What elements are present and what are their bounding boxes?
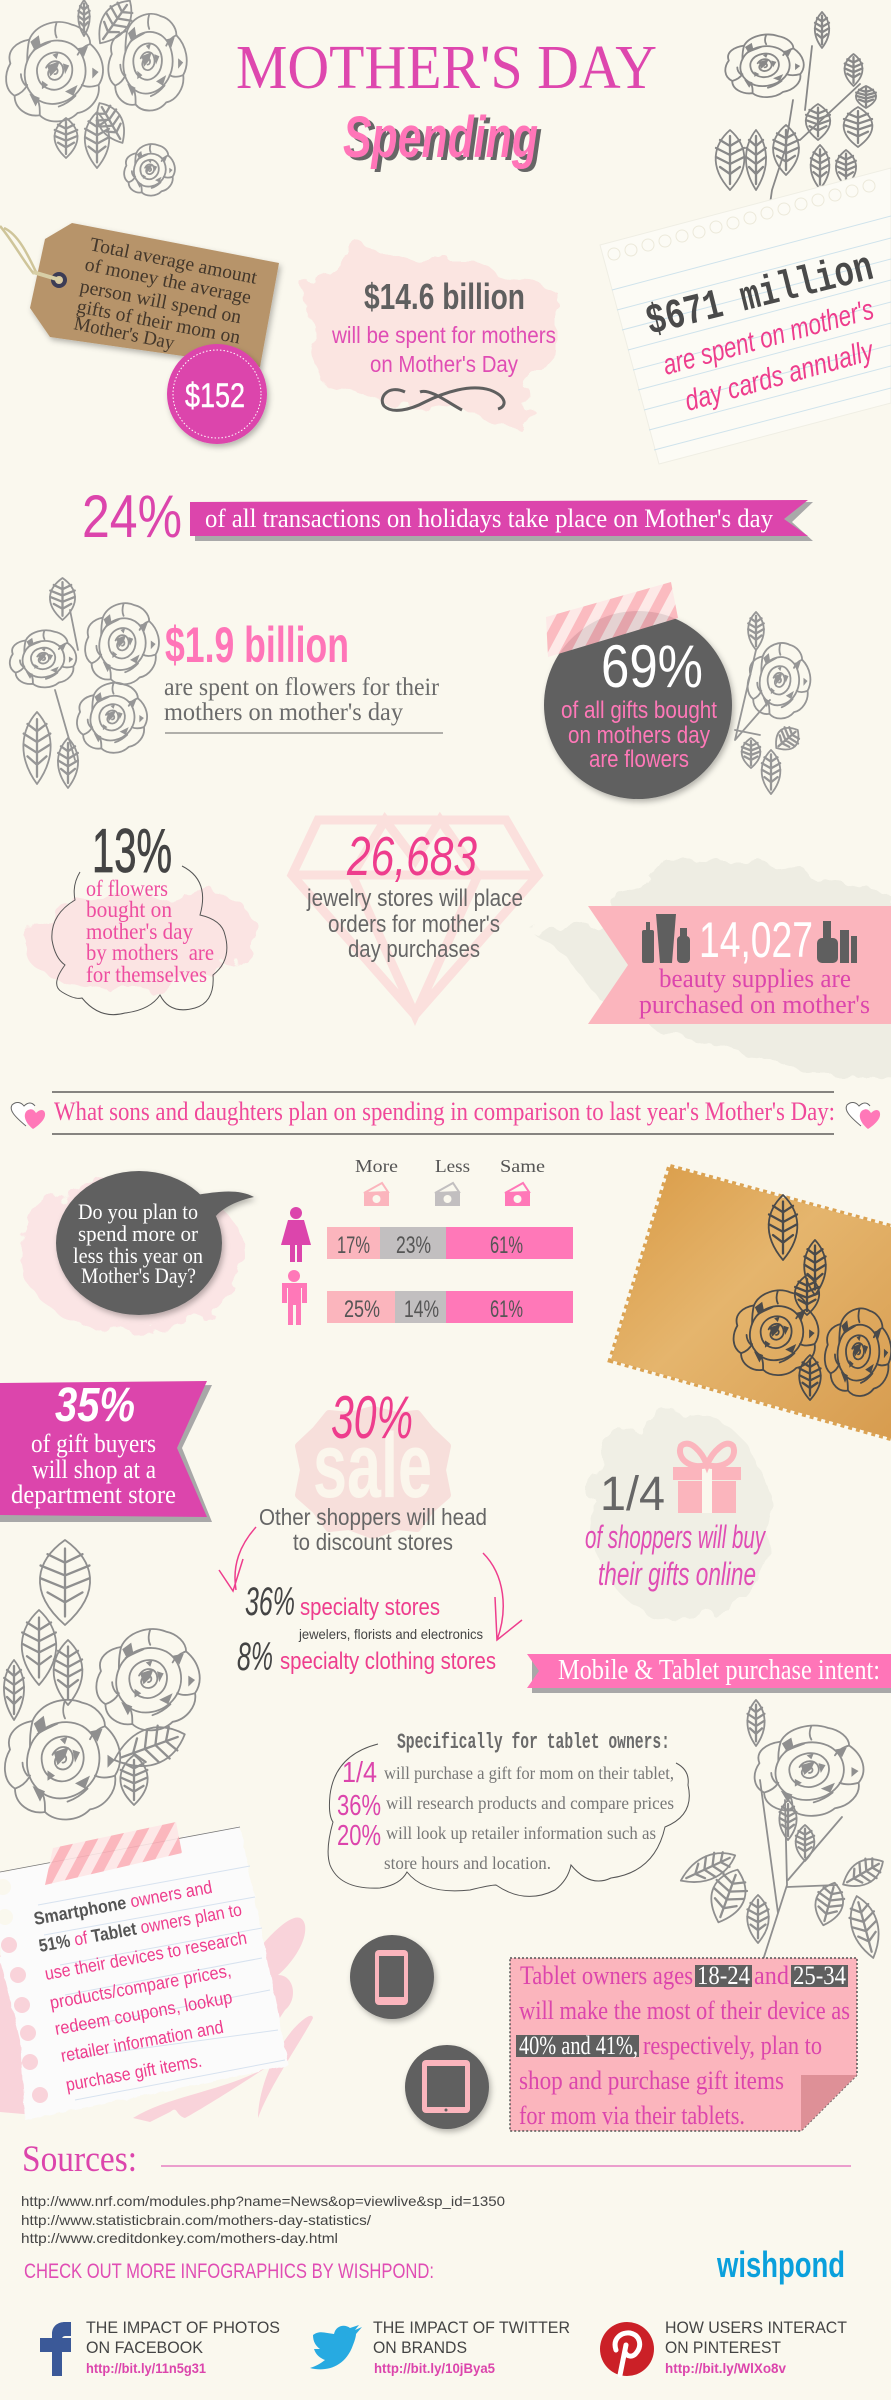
footer: pinterest: ON PINTEREST — [665, 2338, 781, 2357]
torn note: smartphone: use their devices to research — [43, 1928, 248, 1984]
legend labels: Less — [435, 1156, 470, 1176]
diamond: 26,683: jewelry stores will place — [306, 885, 523, 912]
footer: twitter: ON BRANDS — [373, 2338, 467, 2357]
cloud: tablet owners: 20% — [337, 1820, 381, 1852]
sources — [21, 2139, 851, 2246]
sale badge: 30%: 30% — [331, 1384, 413, 1451]
diamond: 26,683: day purchases — [348, 936, 480, 963]
stamp: kraft paper with rose — [611, 1167, 891, 1438]
legend labels — [355, 1156, 545, 1176]
lined note paper — [600, 168, 891, 464]
sale badge: 30%: Other shoppers will head — [259, 1504, 487, 1530]
bar: female: 23% — [396, 1232, 431, 1259]
bar: female: 17% — [337, 1232, 370, 1259]
kraft tag: gifts of their mom on — [75, 296, 242, 349]
icon: tablet — [405, 2045, 489, 2129]
stat: 1/4 online: 1/4 — [600, 1468, 665, 1521]
stat: 1/4 online: of shoppers will buy — [585, 1519, 766, 1555]
note: tablet owners ages: 18-24 — [697, 1961, 750, 1990]
cloud: tablet owners — [328, 1730, 689, 1896]
icon: money less — [435, 1183, 460, 1206]
stat: $1.9 billion — [164, 617, 443, 733]
rose left — [4, 1540, 200, 1820]
rose right of 69% — [735, 612, 810, 794]
circle: 69%: 69% — [601, 633, 703, 700]
banner: 35% — [0, 1379, 212, 1522]
diamond: 26,683: orders for mother's — [328, 911, 500, 938]
icon: phone — [350, 1935, 434, 2019]
torn note: smartphone: redeem coupons, lookup — [53, 1987, 234, 2039]
cloud: 13%: mother's day — [86, 919, 193, 944]
banner: 35%: of gift buyers — [31, 1429, 156, 1458]
legend labels: More — [355, 1156, 398, 1176]
cloud: tablet owners: will purchase a gift for mom on their tablet, — [384, 1763, 674, 1783]
banner: 35%: will shop at a — [32, 1455, 156, 1484]
stat: $14.6 billion: on Mother's Day — [370, 351, 518, 377]
cloud: tablet owners: will research products and compare prices — [386, 1793, 674, 1813]
stats: specialty stores: specialty stores — [300, 1594, 440, 1621]
chart: spending comparison — [281, 1156, 573, 1325]
title — [236, 34, 657, 173]
icon: bottles left — [642, 914, 690, 963]
sale badge: 30%: sale — [313, 1415, 432, 1517]
sale badge: 30% — [259, 1384, 487, 1555]
icon: pinterest — [600, 2322, 654, 2376]
title: MOTHER'S DAY — [236, 34, 657, 102]
cloud: 13%: bought on — [86, 897, 172, 922]
footer: facebook: THE IMPACT OF PHOTOS — [86, 2318, 280, 2337]
logo: wishpond: wishpond — [716, 2244, 845, 2285]
note: tablet owners ages — [510, 1958, 857, 2131]
stat: 1/4 online — [585, 1444, 766, 1592]
torn note: smartphone: products/compare prices, — [48, 1960, 233, 2013]
icon: gift — [673, 1444, 741, 1513]
note: tablet owners ages: 25-34 — [793, 1961, 846, 1990]
torn note: smartphone: retailer information and — [59, 2017, 225, 2066]
circle: $152: $152 — [185, 377, 245, 415]
banner: 24%: of all transactions on holidays take place on Mother's day — [205, 504, 773, 533]
cloud: 13%: 13% — [92, 817, 172, 886]
sources: Sources: — [22, 2139, 137, 2180]
footer: pinterest — [600, 2318, 847, 2376]
footer: pinterest: http://bit.ly/WlXo8v — [665, 2360, 786, 2376]
cloud: tablet owners: Specifically for tablet owners: — [397, 1730, 670, 1755]
torn note: smartphone: 51% of Tablet owners plan to — [37, 1899, 243, 1956]
footer: facebook: ON FACEBOOK — [86, 2338, 204, 2357]
watercolor blobs — [20, 245, 891, 1620]
speech bubble: less this year on — [73, 1243, 203, 1268]
torn note: smartphone — [0, 1822, 289, 2120]
icon: facebook — [40, 2322, 71, 2376]
icon: hearts right — [846, 1102, 880, 1129]
sources: http://www.creditdonkey.com/mothers-day.html — [21, 2230, 338, 2246]
diamond: 26,683 — [292, 820, 538, 1015]
bar: female — [327, 1227, 573, 1259]
icon: money same — [505, 1183, 530, 1206]
kraft tag: of money the average — [83, 254, 253, 309]
sources: http://www.nrf.com/modules.php?name=News&op=viewlive&sp_id=1350 — [21, 2193, 505, 2209]
note: tablet owners ages: respectively, plan to — [643, 2031, 822, 2060]
icon: male — [282, 1270, 307, 1325]
stat: $1.9 billion: are spent on flowers for their — [164, 674, 440, 701]
footer: twitter — [310, 2318, 570, 2376]
icon: bottles right — [817, 921, 857, 963]
speech bubble — [56, 1171, 254, 1315]
stat: $1.9 billion: $1.9 billion — [165, 617, 349, 673]
stat: $14.6 billion: $14.6 billion — [364, 276, 525, 317]
stat: $14.6 billion — [331, 276, 556, 377]
cloud: tablet owners: 1/4 — [342, 1757, 377, 1789]
icon: female — [281, 1207, 311, 1262]
banner: 24%: 24% — [82, 483, 182, 550]
footer: pinterest: HOW USERS INTERACT — [665, 2318, 847, 2337]
speech bubble: spend more or — [78, 1221, 199, 1246]
note: tablet owners ages: and — [754, 1961, 789, 1990]
speech bubble: Do you plan to — [78, 1199, 198, 1224]
title: Spending — [347, 108, 542, 173]
icon: twitter — [310, 2325, 362, 2369]
circle: $152 — [167, 344, 267, 444]
sale badge: 30%: to discount stores — [293, 1529, 453, 1555]
arrow: left — [219, 1527, 256, 1591]
footer: twitter: http://bit.ly/10jBya5 — [374, 2360, 495, 2376]
flourish — [382, 388, 504, 410]
footer: facebook — [40, 2318, 280, 2376]
bar: male — [327, 1291, 573, 1323]
watercolor behind torn note — [0, 1918, 313, 2122]
banner: 14,027 beauty supplies: 14,027 — [699, 912, 813, 968]
kraft tag: Total average amount — [88, 234, 259, 289]
note: tablet owners ages: Tablet owners ages — [520, 1961, 693, 1990]
diamond: 26,683: 26,683 — [346, 825, 477, 887]
cloud: tablet owners: 36% — [337, 1790, 381, 1822]
stats: specialty stores — [237, 1580, 496, 1679]
stat: $14.6 billion: will be spent for mothers — [331, 322, 556, 348]
circle: 69% — [544, 582, 732, 799]
bar: male: 61% — [490, 1296, 523, 1323]
kraft tag: person will spend on — [78, 276, 243, 328]
bar: male: 25% — [344, 1296, 380, 1323]
banner: 24% — [82, 483, 813, 550]
kraft tag: Mother's Day — [72, 313, 176, 354]
rose top left — [6, 0, 187, 196]
stats: specialty stores: jewelers, florists and electronics — [298, 1626, 483, 1642]
speech bubble: Mother's Day? — [81, 1263, 196, 1288]
note punch holes — [0, 1879, 13, 1925]
legend labels: Same — [500, 1156, 545, 1176]
circle: 69%: of all gifts bought — [561, 697, 717, 724]
title: Spending — [343, 105, 538, 170]
torn note: smartphone: purchase gift items. — [64, 2051, 203, 2095]
stat: 1/4 online: their gifts online — [598, 1556, 756, 1592]
rose right lower — [676, 1700, 889, 1961]
bar: male: 14% — [404, 1296, 439, 1323]
circle: 69%: on mothers day — [568, 722, 710, 749]
arrow: right — [483, 1553, 522, 1640]
note: tablet owners ages: shop and purchase gift items — [519, 2066, 784, 2095]
note: tablet owners ages: will make the most of their device as — [519, 1996, 850, 2025]
note: tablet owners ages: for mom via their tablets. — [519, 2101, 745, 2130]
cloud: tablet owners: store hours and location. — [384, 1853, 551, 1873]
kraft tag — [0, 223, 279, 367]
footer: facebook: http://bit.ly/11n5g31 — [86, 2360, 206, 2376]
rose top right — [716, 12, 876, 225]
call to action: CHECK OUT MORE INFOGRAPHICS BY WISHPOND: — [24, 2260, 434, 2283]
cloud: 13% — [52, 817, 227, 1015]
icon: money more — [364, 1183, 389, 1206]
banner: 14,027 beauty supplies: purchased on mother's — [639, 990, 870, 1019]
stats: specialty stores: 36% — [245, 1580, 295, 1624]
footer: twitter: THE IMPACT OF TWITTER — [373, 2318, 570, 2337]
cloud: 13%: of flowers — [86, 876, 168, 901]
sources: http://www.statisticbrain.com/mothers-day-statistics/ — [21, 2212, 371, 2228]
note: tablet owners ages: 40% and 41%, — [519, 2031, 638, 2060]
banner: 35%: 35% — [55, 1379, 135, 1432]
cloud: 13%: by mothers are — [86, 940, 214, 965]
cloud: tablet owners: will look up retailer information such as — [386, 1823, 656, 1843]
cloud: 13%: for themselves — [86, 962, 207, 987]
bar: female: 61% — [490, 1232, 523, 1259]
stat: $1.9 billion: mothers on mother's day — [164, 699, 403, 726]
stats: specialty stores: 8% — [237, 1635, 273, 1679]
icon: hearts left — [11, 1102, 45, 1129]
banner: 35%: department store — [11, 1480, 176, 1509]
circle: 69%: are flowers — [589, 746, 689, 773]
banner: 14,027 beauty supplies: beauty supplies are — [659, 964, 851, 993]
torn note: smartphone: Smartphone owners and — [32, 1877, 214, 1929]
rose: flowers left — [10, 578, 159, 788]
stats: specialty stores: specialty clothing stores — [280, 1648, 496, 1675]
banner: 14,027 beauty supplies — [588, 906, 891, 1024]
